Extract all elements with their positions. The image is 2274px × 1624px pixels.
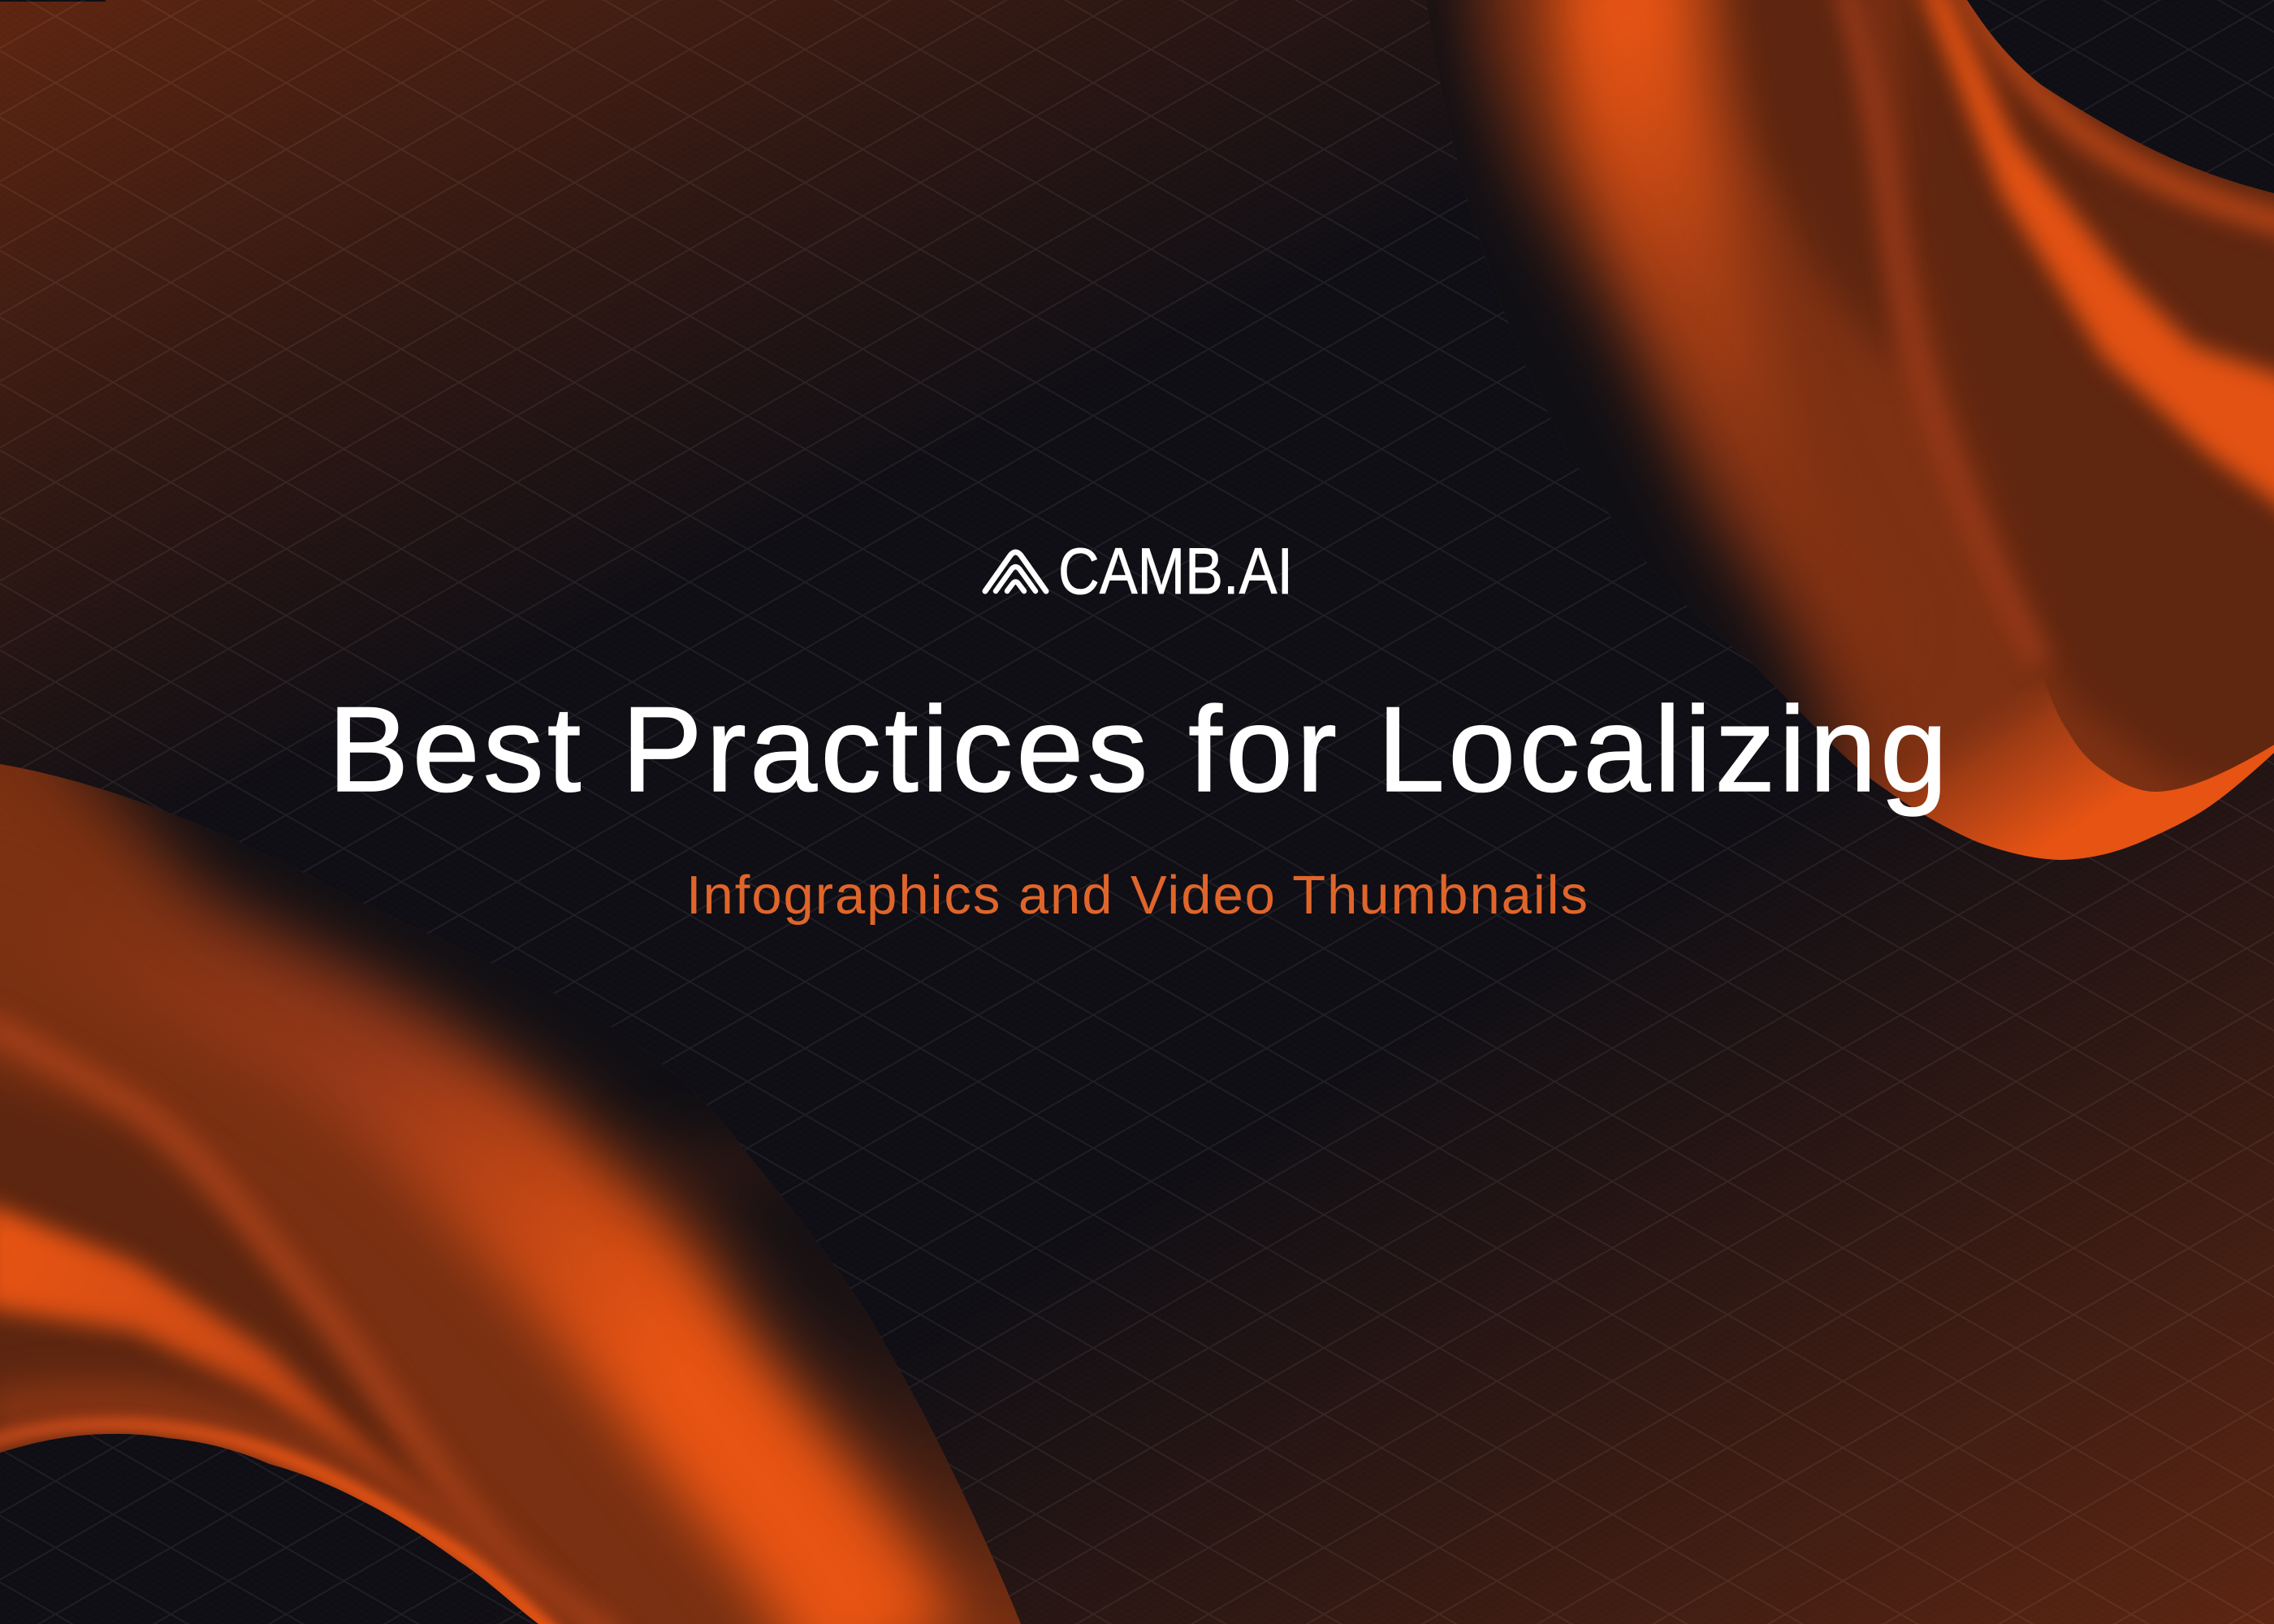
drape: top right <box>1426 0 2274 860</box>
icon: chevrons <box>985 552 1046 591</box>
drape: bottom left <box>0 764 1021 1624</box>
subtitle: Infographics and Video Thumbnails <box>686 865 1588 926</box>
logo: CAMB.AI: CAMB.AI <box>1058 535 1293 608</box>
logo: CAMB.AI <box>985 535 1293 608</box>
title: Best Practices for Localizing <box>328 681 1948 817</box>
